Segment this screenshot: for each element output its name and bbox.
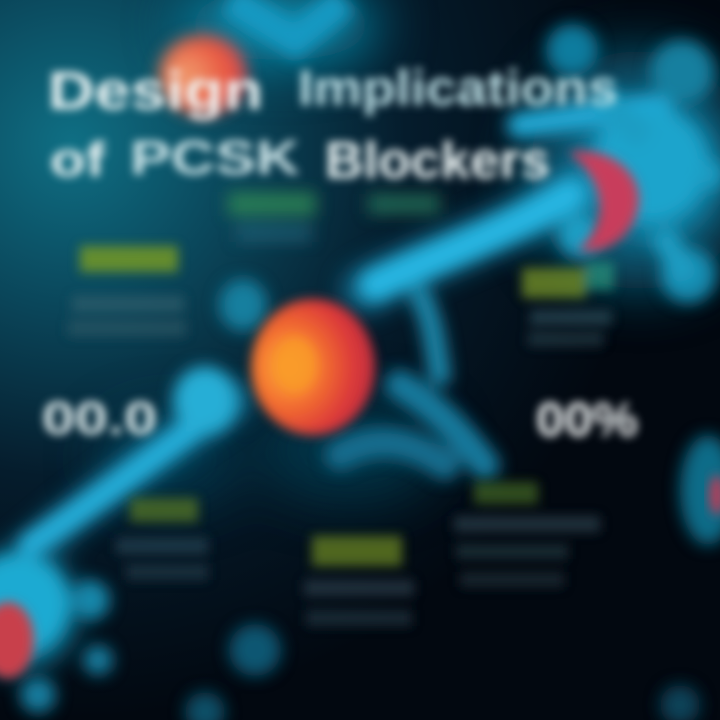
text block: upper right (522, 262, 614, 346)
main axon: upper right (375, 195, 570, 285)
upper right cell body (594, 109, 706, 221)
small floating blobs (229, 624, 281, 676)
lower left cell body (0, 555, 68, 655)
neuron network glow (0, 100, 720, 672)
title: Blockers (325, 132, 550, 190)
main axon: lower left (30, 405, 225, 545)
statistic left: 00.0 (42, 392, 157, 444)
title: Implications (298, 60, 618, 116)
background glow: top and right (100, 0, 720, 505)
central red-orange cell (251, 299, 375, 435)
text block: lower right (454, 482, 600, 587)
top branch (230, 0, 345, 40)
right edge red cell (709, 475, 720, 515)
statistic right: 00% (536, 394, 638, 447)
title: Design (48, 61, 263, 121)
text block: lower left (116, 498, 208, 580)
text block: upper left (68, 246, 186, 336)
top green labels (228, 192, 440, 242)
title (48, 60, 618, 190)
title: of (50, 134, 106, 187)
text block: lower centre (304, 536, 414, 626)
top red-orange cell (159, 35, 247, 115)
right edge cell (680, 435, 720, 545)
title: PCSK (130, 132, 300, 185)
upper right red crescent (568, 151, 639, 251)
lower right branches (400, 385, 485, 465)
lower left red cell (0, 602, 34, 678)
